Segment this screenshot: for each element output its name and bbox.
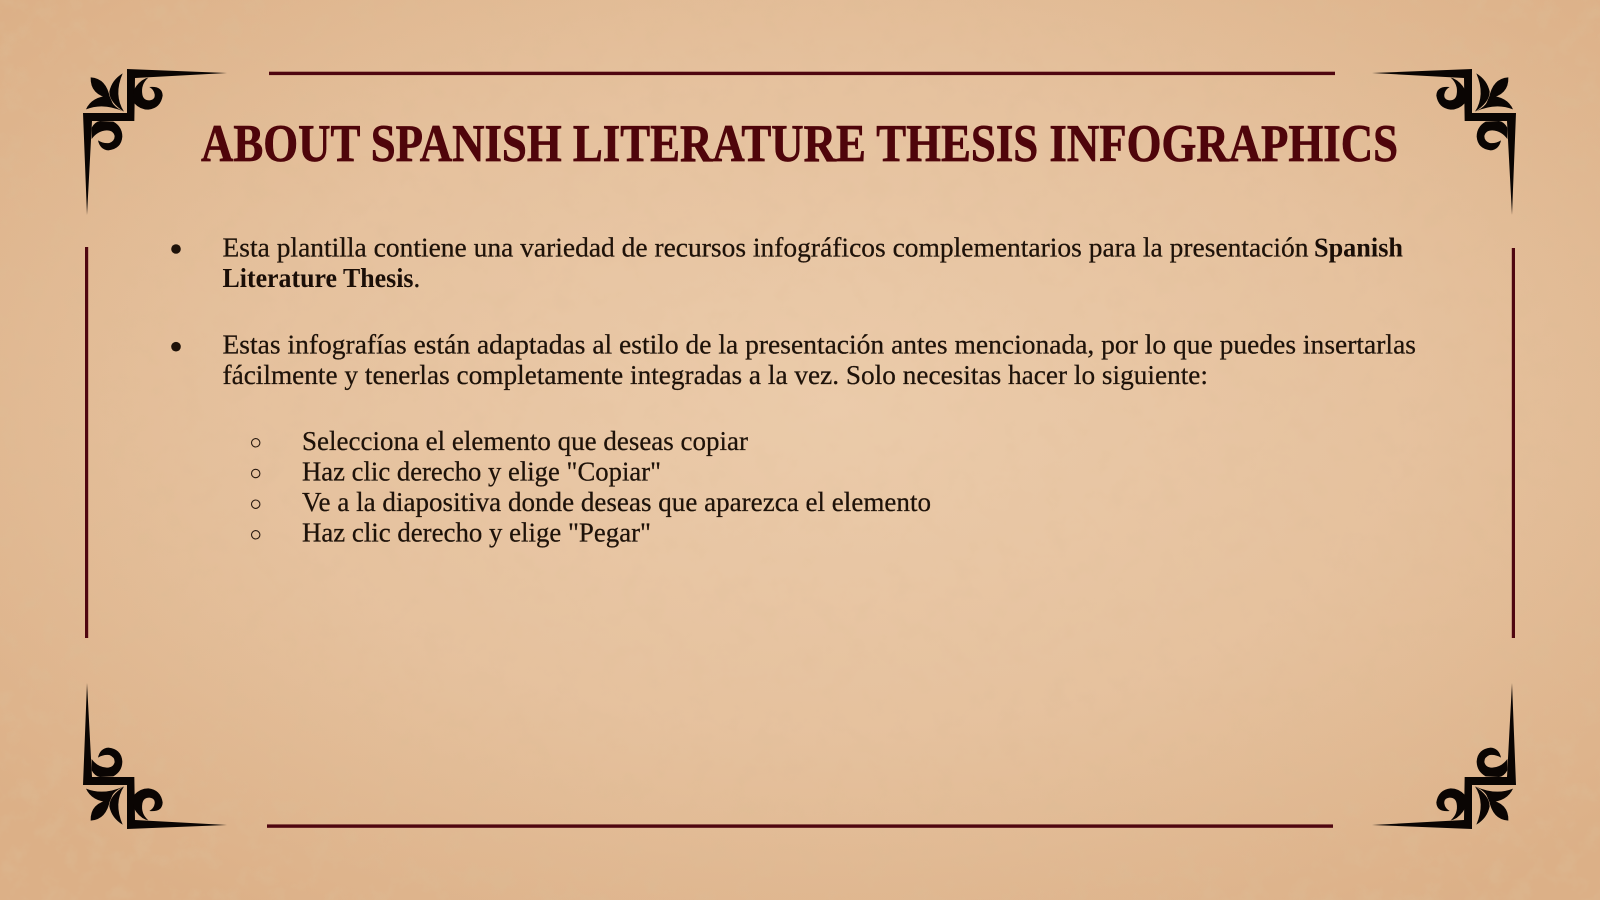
bullet item 2 bbox=[171, 330, 1416, 390]
bullet item 1: Literature Thesis bbox=[222, 263, 414, 293]
ornament: top-right corner bbox=[1372, 69, 1516, 215]
step 1: Selecciona el elemento que deseas copiar bbox=[302, 426, 748, 456]
frame line: right bbox=[1512, 248, 1515, 638]
bullet item 2: fácilmente y tenerlas completamente integradas a la vez. Solo necesitas hacer lo siguiente: bbox=[222, 360, 1208, 390]
sub-list of steps bbox=[252, 426, 931, 548]
bullet list bbox=[171, 232, 1416, 548]
step 2: Haz clic derecho y elige "Copiar" bbox=[302, 456, 661, 486]
ornament: bottom-right corner bbox=[1372, 683, 1516, 829]
title: ABOUT SPANISH LITERATURE THESIS INFOGRAPHICS bbox=[201, 115, 1398, 173]
frame line: bottom bbox=[267, 824, 1333, 828]
bullet item 2: Estas infografías están adaptadas al estilo de la presentación antes mencionada, por lo que puedes insertarlas bbox=[222, 330, 1416, 360]
step 4: Haz clic derecho y elige "Pegar" bbox=[302, 518, 651, 548]
ornament: bottom-left corner bbox=[83, 683, 227, 829]
bullet item 1 bbox=[171, 232, 1403, 293]
ornament: top-left corner bbox=[83, 69, 227, 215]
bullet item 1: Spanish bbox=[1314, 232, 1403, 262]
bullet item 1: . bbox=[414, 263, 420, 293]
frame line: left bbox=[85, 247, 88, 638]
frame line: top bbox=[269, 72, 1335, 75]
step 3: Ve a la diapositiva donde deseas que aparezca el elemento bbox=[302, 487, 931, 517]
bullet item 1: Esta plantilla contiene una variedad de recursos infográficos complementarios para la presentación bbox=[222, 232, 1309, 262]
